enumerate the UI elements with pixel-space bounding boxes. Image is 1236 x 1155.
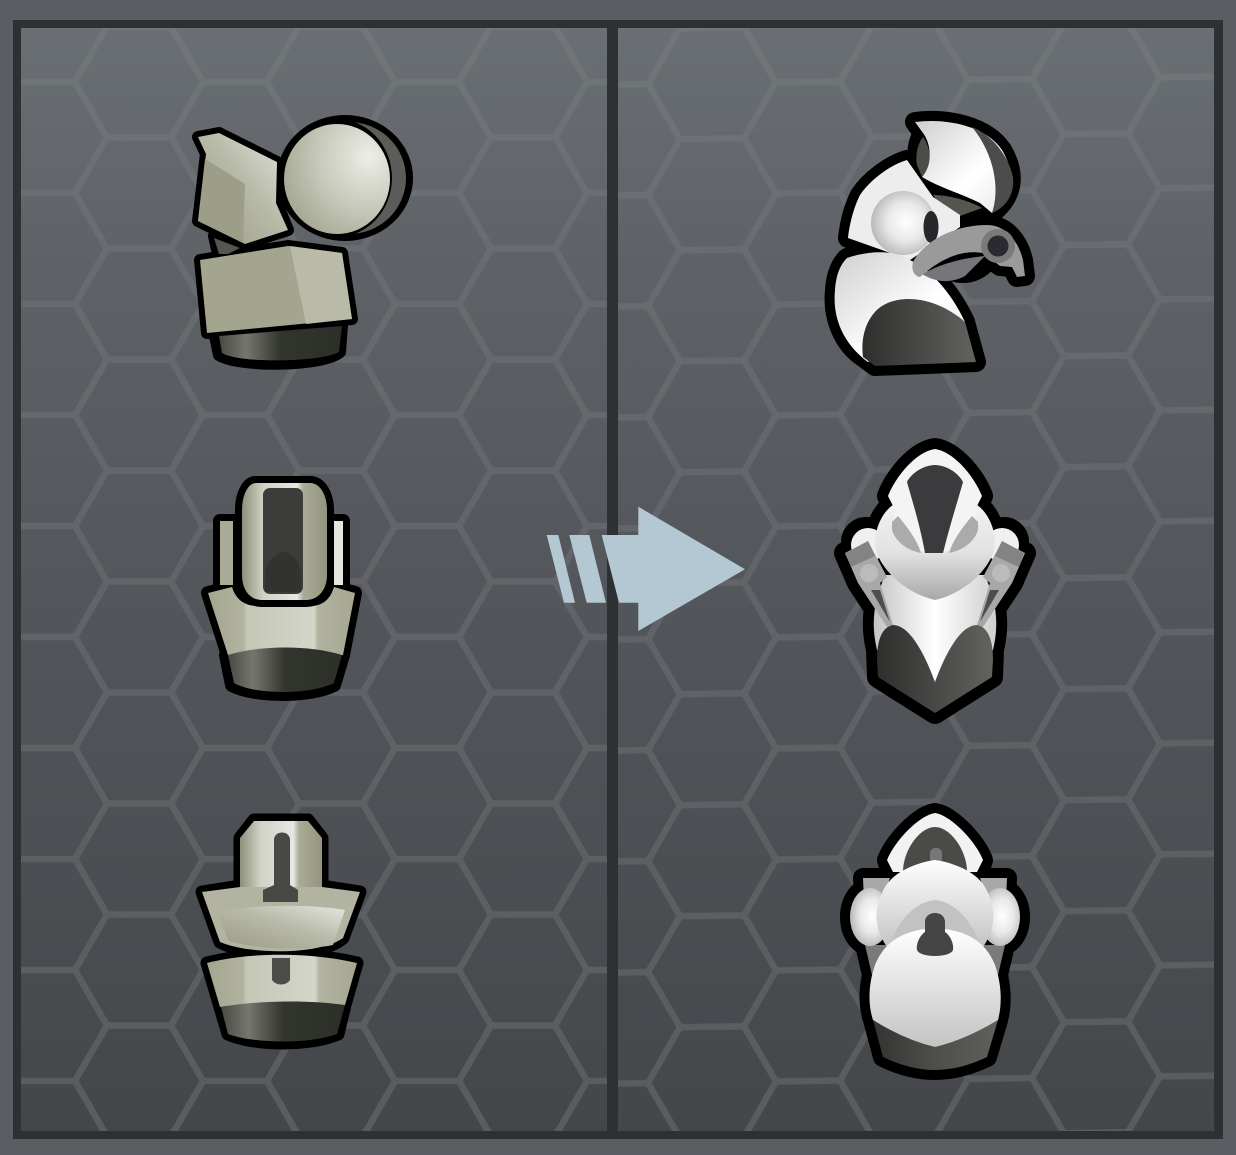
upper body <box>848 160 960 260</box>
scope disc <box>282 119 392 237</box>
icon: upgraded turret, front view <box>845 449 1025 713</box>
silhouette <box>850 813 1020 1070</box>
arm <box>912 225 1025 277</box>
bottom shell <box>869 928 1001 1047</box>
middle dome <box>877 860 993 947</box>
dark base <box>873 1020 998 1070</box>
right arm slit <box>980 590 999 622</box>
stem <box>917 913 953 956</box>
left arm barrel <box>860 564 878 582</box>
inner arch <box>893 900 978 955</box>
helmet rear <box>972 127 1013 213</box>
base <box>228 648 342 692</box>
muzzle bore <box>988 236 1008 256</box>
silhouette <box>845 449 1025 713</box>
helmet inner <box>916 137 930 177</box>
upper ears <box>863 878 890 905</box>
lower slot <box>272 958 290 984</box>
slot ball <box>265 552 301 592</box>
slot <box>263 488 303 594</box>
upper block <box>198 133 288 244</box>
neck <box>214 238 240 254</box>
icon: upgraded turret, side view <box>835 121 1025 366</box>
dark base <box>862 299 976 366</box>
neck <box>933 195 982 216</box>
right arm <box>977 541 1025 627</box>
body <box>208 587 355 655</box>
icon: basic turret, rear view <box>202 820 360 1043</box>
icon: basic turret, front view <box>208 483 355 694</box>
arrow stripe 2 <box>569 535 606 603</box>
base <box>219 326 342 360</box>
head <box>240 821 322 892</box>
middle tier <box>202 887 360 951</box>
collar <box>875 505 995 600</box>
panel: before <box>21 28 607 1131</box>
head recess <box>903 827 967 872</box>
silhouette <box>208 521 355 694</box>
head stem <box>930 848 942 864</box>
left arm <box>845 541 893 627</box>
lower block <box>200 246 352 333</box>
muzzle <box>981 229 1015 263</box>
arrow head <box>602 507 745 631</box>
body <box>874 575 996 700</box>
cheek panels <box>892 516 921 553</box>
silhouette <box>198 121 407 364</box>
middle tier highlight <box>217 906 345 948</box>
dark belly <box>877 625 993 713</box>
side balls <box>850 888 890 946</box>
head slot <box>263 832 298 902</box>
under arm <box>922 256 985 281</box>
left arm slit <box>871 590 890 622</box>
upper block shadow facet <box>198 159 245 243</box>
silhouette <box>202 820 360 1043</box>
head <box>888 449 982 552</box>
icon: basic turret, side view <box>198 119 407 364</box>
lower tier <box>207 955 357 1007</box>
base <box>221 1001 345 1042</box>
side ears <box>220 521 233 585</box>
arrow stripe 1 <box>547 535 575 603</box>
left arm cap <box>846 541 875 567</box>
visor <box>907 465 963 553</box>
panel: after <box>618 28 1214 1131</box>
lower block light facet <box>290 246 352 324</box>
icon: upgraded turret, rear view <box>850 813 1020 1070</box>
right arm cap <box>995 541 1024 567</box>
lower body <box>835 252 965 362</box>
scope rear <box>292 122 406 234</box>
eye slot <box>924 211 938 243</box>
head <box>242 483 327 600</box>
arrow: upgrade direction <box>547 507 745 631</box>
sphere joint <box>871 191 935 255</box>
helmet <box>915 121 1011 213</box>
silhouette <box>835 121 1025 366</box>
right arm barrel <box>992 564 1010 582</box>
lower ears <box>865 945 890 975</box>
shoulders <box>851 528 885 562</box>
head <box>887 813 983 872</box>
